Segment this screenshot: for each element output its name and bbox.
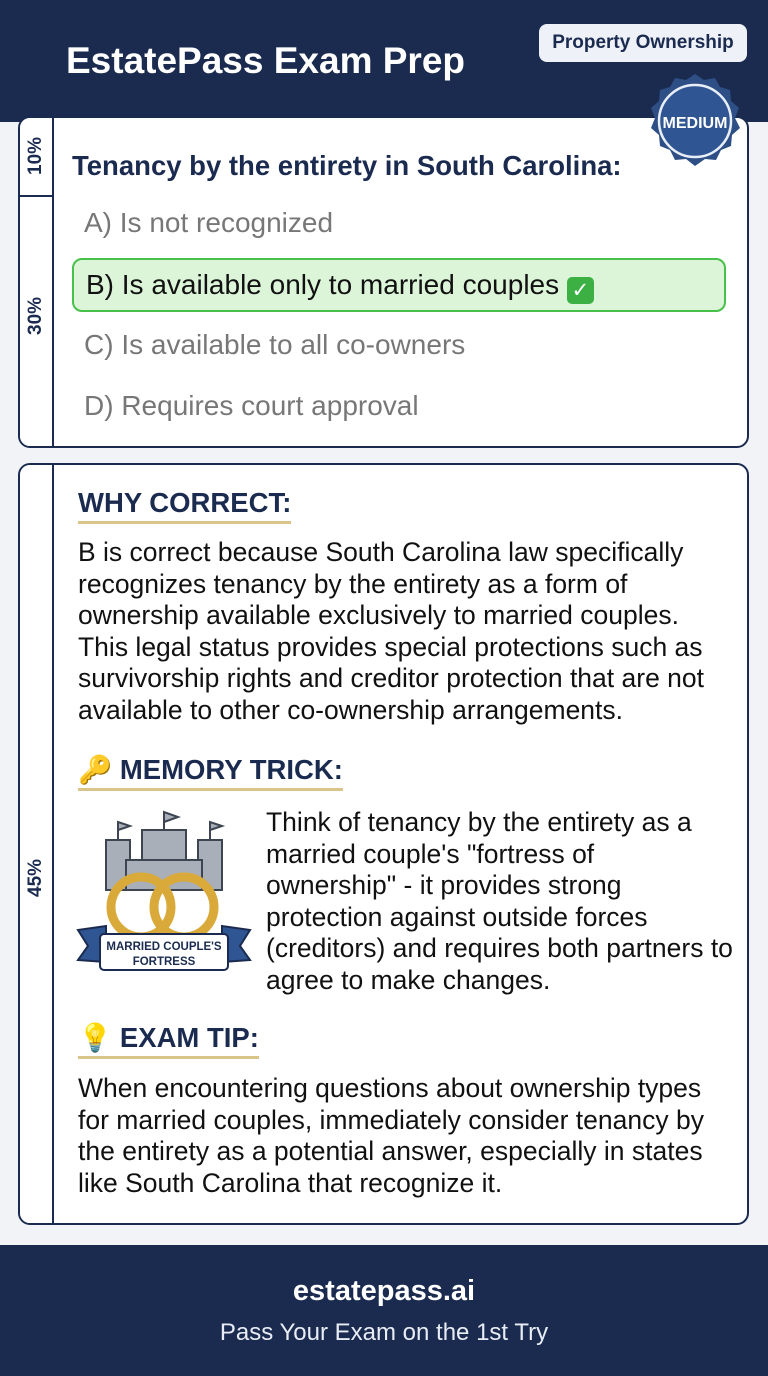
panel: explanation [18,463,749,1225]
question text: Tenancy by the entirety in South Carolina: [72,150,622,181]
footer [0,1245,768,1376]
icon: fortress with rings: MARRIED COUPLE'S [106,941,222,953]
option B correct: B) Is available only to married couples [86,269,559,300]
option B correct: ✓ [572,279,589,302]
badge: medium: MEDIUM [663,115,727,132]
text: why correct: B is correct because South Carolina law specifically recognizes tenancy by the entirety as a form of ownership available exclusively to married couples. This legal status provides special protections such as survivorship rights and creditor protection that are not available to other co-ownership arrangements. [78,537,704,724]
panel: question [18,116,749,448]
badge: medium [651,74,740,166]
option C: C) Is available to all co-owners [84,329,465,360]
text: memory trick: Think of tenancy by the entirety as a [266,807,692,837]
text: memory trick: ownership" - it provides strong [266,870,622,900]
footer tagline: Pass Your Exam on the 1st Try [220,1319,548,1346]
title: EstatePass Exam Prep [66,40,465,81]
icon: fortress with rings: FORTRESS [133,956,196,968]
label 30%: 30% [25,297,46,335]
icon: fortress with rings [76,810,252,971]
tag: property ownership [539,24,747,62]
header [0,0,768,122]
text: exam tip: When encountering questions about ownership types for married couples, immediately consider tenancy by the entirety as a potential answer, especially in states like South Carolina that recognize it. [78,1073,704,1198]
text: memory trick [266,807,733,994]
label 10%: 10% [25,137,46,175]
option B correct [72,258,726,312]
heading: exam tip: 💡 EXAM TIP: [78,1022,259,1053]
heading: memory trick: 🔑 MEMORY TRICK: [78,754,343,785]
tag: property ownership: Property Ownership [552,32,734,53]
label 45%: 45% [25,859,46,897]
heading: why correct: WHY CORRECT: [78,487,291,518]
option D: D) Requires court approval [84,390,419,421]
sidebar [20,465,54,1223]
sidebar [20,118,54,446]
option A: A) Is not recognized [84,207,333,238]
text: memory trick: agree to make changes. [266,964,550,994]
text: memory trick: protection against outside forces [266,902,648,932]
text: memory trick: (creditors) and requires both partners to [266,933,733,963]
text: memory trick: married couple's "fortress of [266,838,594,868]
footer site: estatepass.ai [293,1275,475,1307]
